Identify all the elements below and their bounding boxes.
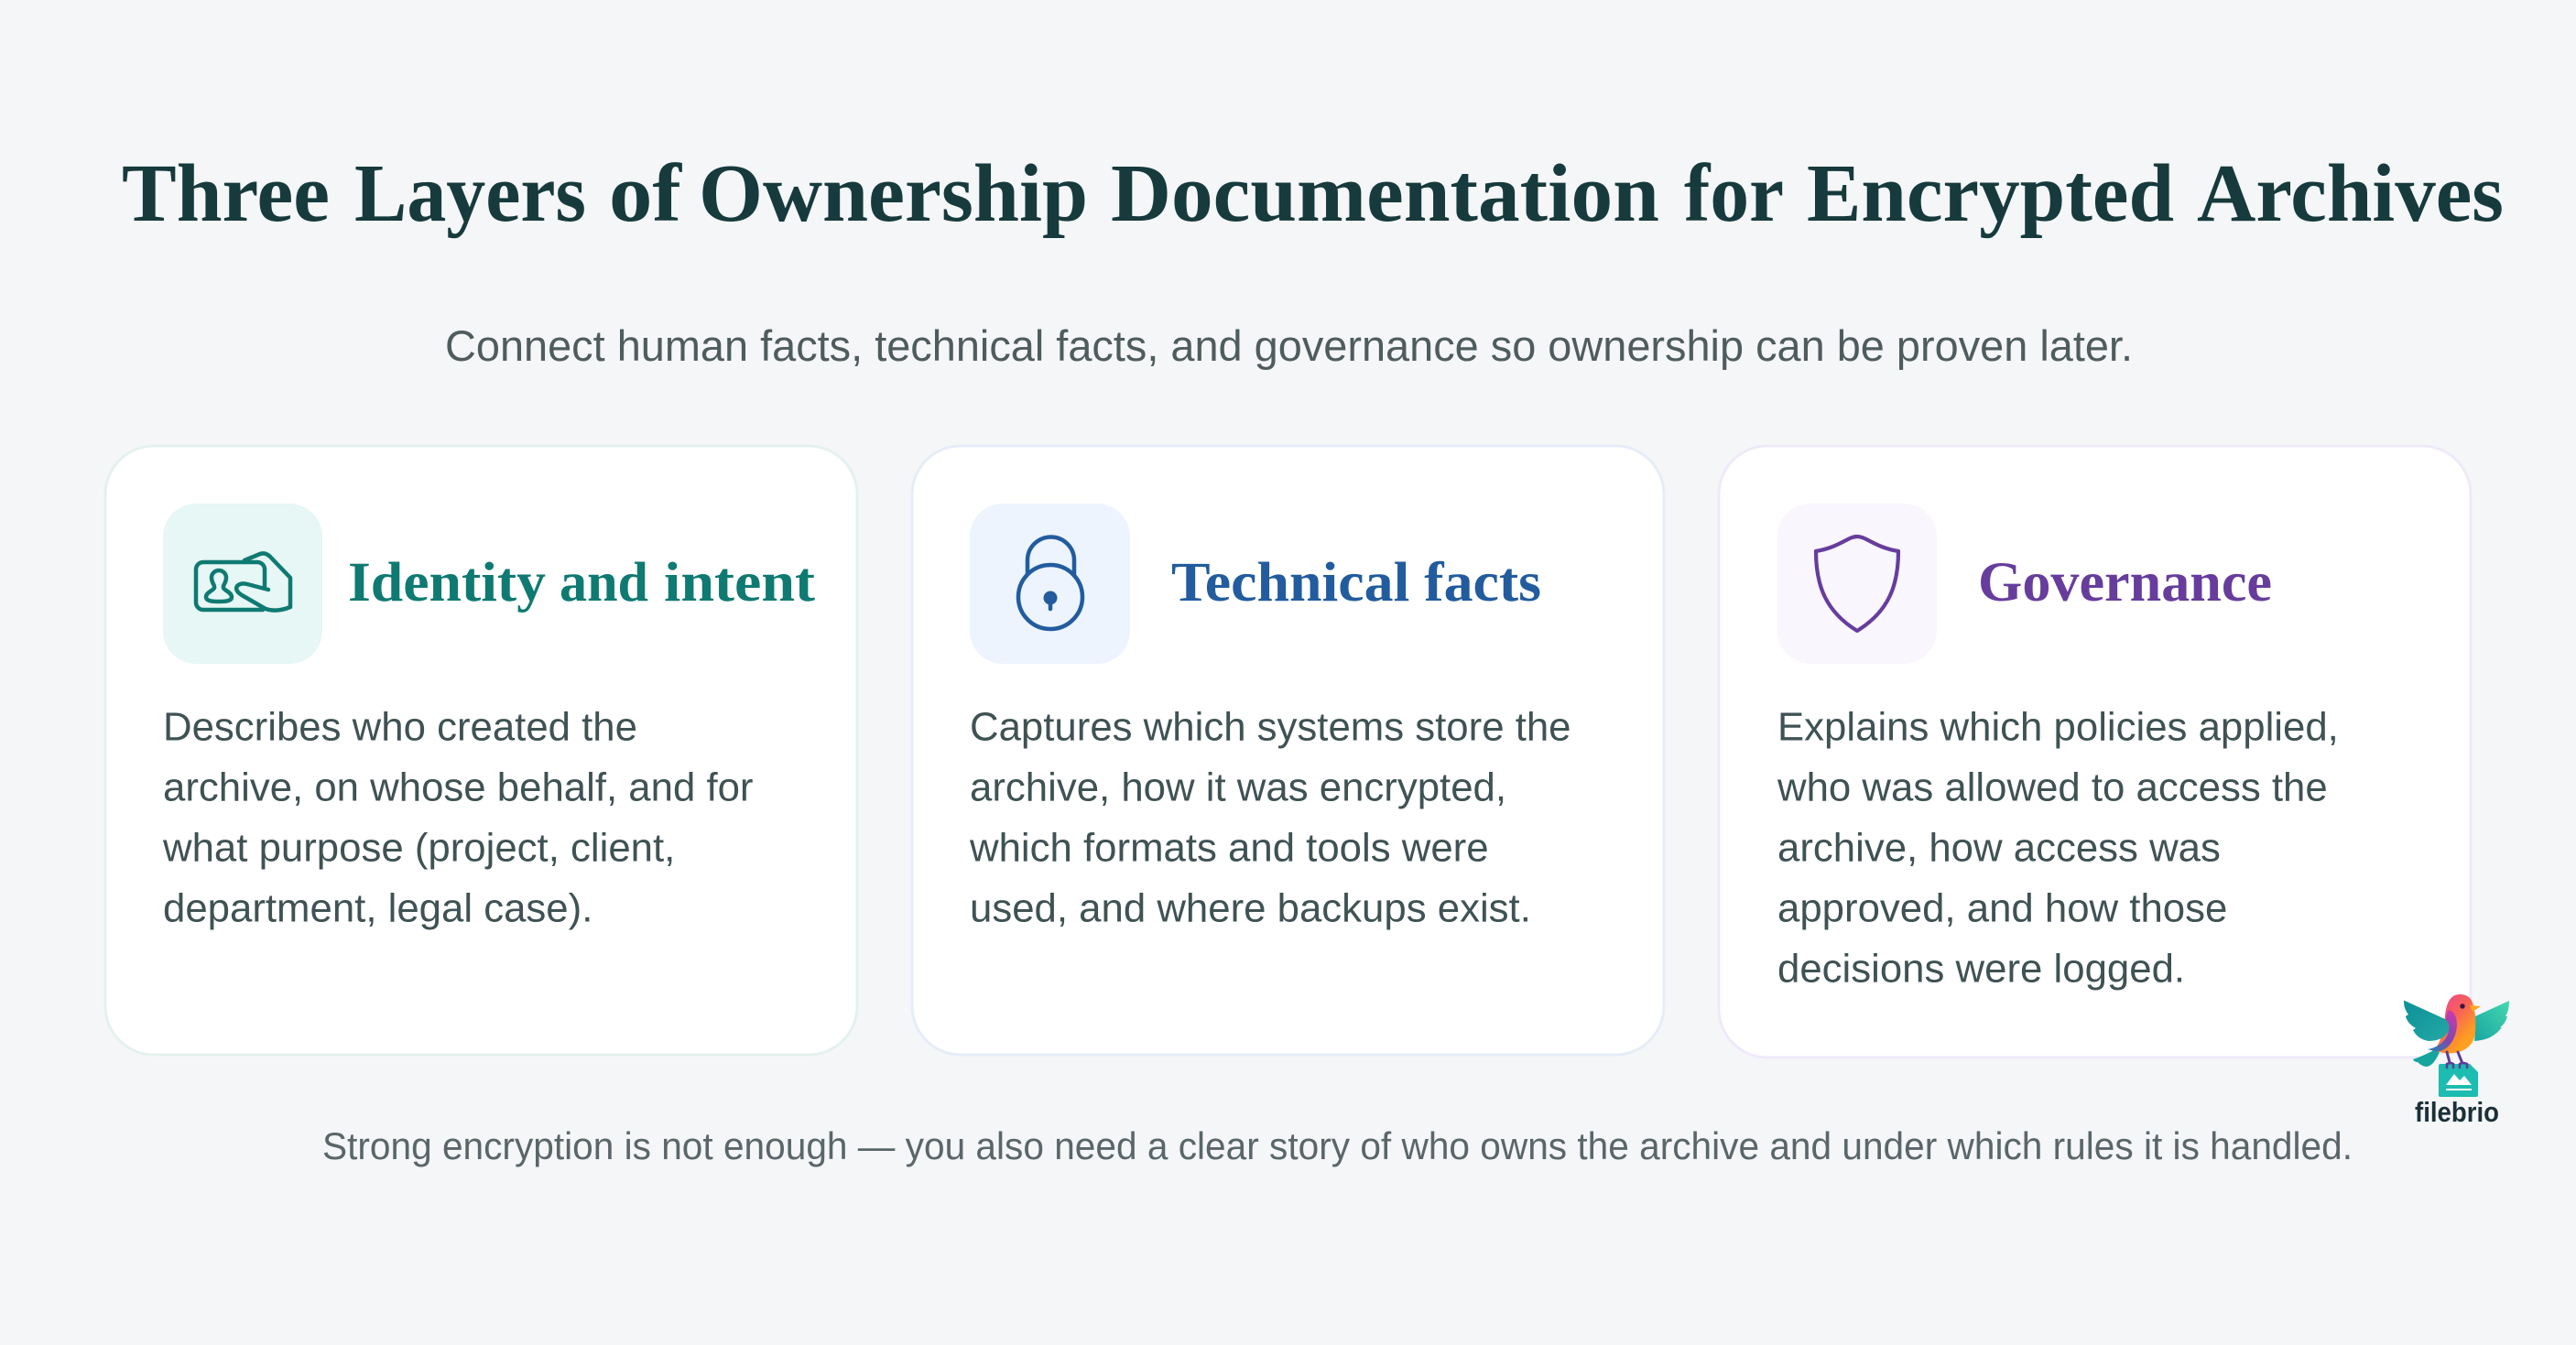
tail <box>2413 1049 2440 1067</box>
logo: filebrio bird <box>2404 994 2509 1128</box>
panel: governance <box>1719 446 2471 1058</box>
panel: identity and intent <box>105 446 857 1055</box>
subtitle: Connect human facts, technical facts, and governance so ownership can be proven later. <box>445 321 2133 370</box>
icon: padlock <box>1018 537 1082 629</box>
right wing <box>2474 1001 2509 1041</box>
body text <box>162 705 754 930</box>
legs <box>2447 1052 2463 1066</box>
heading: Technical facts <box>1171 552 1541 613</box>
body <box>2434 994 2476 1053</box>
body text: approved, and how those <box>1777 886 2227 930</box>
title <box>122 148 2504 239</box>
body text: Captures which systems store the <box>970 705 1571 749</box>
body text: who was allowed to access the <box>1777 765 2328 809</box>
body text <box>1777 705 2339 991</box>
title: Documentation <box>1111 148 1659 239</box>
heading: intent <box>664 552 816 613</box>
icon tile: governance <box>1777 504 1937 664</box>
body text <box>969 705 1571 930</box>
icon tile: technical <box>970 504 1130 664</box>
title: Ownership <box>699 148 1088 239</box>
body text: what purpose (project, client, <box>162 826 675 870</box>
heading: Identity <box>348 552 546 613</box>
body text: Describes who created the <box>163 705 637 749</box>
heading <box>348 552 816 613</box>
title: Three <box>122 148 330 239</box>
title: Layers <box>354 148 586 239</box>
beak <box>2470 1005 2481 1012</box>
card background <box>912 446 1664 1055</box>
footer note: Strong encryption is not enough — you also need a clear story of who owns the archive and under which rules it is handled. <box>322 1124 2353 1167</box>
file image glyph <box>2446 1074 2472 1085</box>
eye <box>2460 1003 2465 1009</box>
wordmark: filebrio <box>2415 1096 2499 1128</box>
body text: archive, on whose behalf, and for <box>163 765 754 809</box>
card background <box>1719 446 2471 1058</box>
panel: technical facts <box>912 446 1664 1055</box>
title: for <box>1684 148 1784 239</box>
feet <box>2447 1063 2467 1068</box>
icon: id card in hand <box>196 553 290 611</box>
body text: used, and where backups exist. <box>970 886 1531 930</box>
title: Archives <box>2197 148 2504 239</box>
file icon <box>2439 1064 2478 1097</box>
heading: and <box>560 552 648 613</box>
body text: department, legal case). <box>163 886 592 930</box>
body text: which formats and tools were <box>969 826 1489 870</box>
title: Encrypted <box>1807 148 2174 239</box>
left wing <box>2404 1001 2449 1041</box>
wing shading <box>2428 1011 2457 1051</box>
body text: decisions were logged. <box>1777 947 2185 991</box>
body text: archive, how it was encrypted, <box>970 765 1506 809</box>
title: of <box>609 148 682 239</box>
heading: Governance <box>1978 552 2272 613</box>
body text: archive, how access was <box>1777 826 2221 870</box>
card background <box>105 446 857 1055</box>
icon: shield <box>1816 537 1898 631</box>
body text: Explains which policies applied, <box>1777 705 2339 749</box>
icon tile: identity <box>163 504 322 664</box>
